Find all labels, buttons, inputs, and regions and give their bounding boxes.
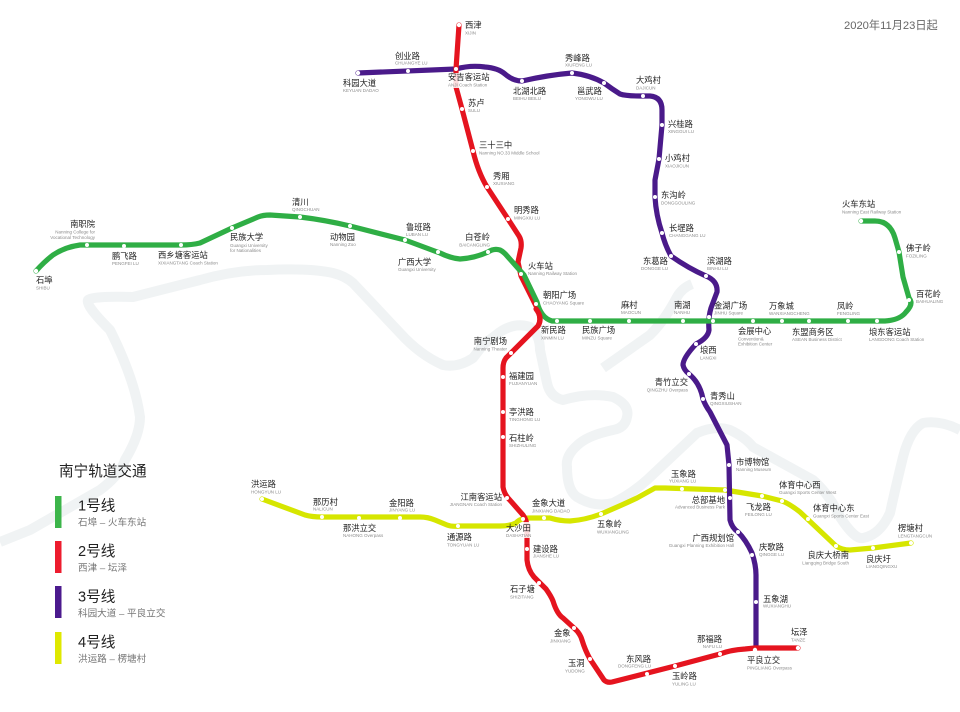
station: 通源路: TONGYUAN LU [447, 542, 479, 548]
station: 广西大学: Guangxi University [398, 267, 437, 272]
date note: 2020年11月23日起 [844, 18, 938, 32]
station: 民族大学: Guangxi University [230, 243, 269, 248]
station: 广西规划馆: 广西规划馆 [692, 533, 734, 543]
station: 朝阳广场: CHAOYANG Square [543, 300, 585, 306]
station: 玉岭路 [672, 671, 698, 686]
station: 清川: 清川 [292, 197, 309, 207]
station: 佛子岭 [906, 243, 931, 258]
station: 长堽路 [669, 223, 706, 238]
station: 兴桂路: 兴桂路 [668, 119, 694, 129]
station: 金象大道 [532, 498, 571, 514]
station: 秀峰路: XIUFENG LU [565, 62, 592, 68]
station: 青秀山: 青秀山 [710, 391, 735, 401]
metro line 1 [36, 215, 911, 321]
station: 秀厢: XIUXIANG [493, 181, 515, 186]
station: 洪运路: HONGYUN LU [251, 490, 281, 494]
station: 青竹立交 [647, 377, 689, 392]
station: 兴桂路 [668, 119, 694, 134]
station: 广西规划馆: Guangxi Planning Exhibition Hall [669, 543, 734, 548]
station: 埌西 [700, 345, 717, 360]
station: 秀厢: 秀厢 [493, 171, 510, 181]
station: 明秀路: MINGXIU LU [514, 216, 540, 220]
station: 五象岭: WUXIANGLING [597, 530, 630, 534]
legend: line 2 [55, 541, 127, 574]
station: 体育中心西: 体育中心西 [779, 480, 820, 490]
station: 福建园 [509, 371, 537, 386]
station: 火车站: Nanning Railway Station [528, 271, 578, 276]
station: 动物园: Nanning Zoo [330, 242, 356, 247]
station: 凤岭 [837, 301, 861, 316]
station: 楞塘村: LENGTANGCUN [898, 534, 932, 538]
station: 百花岭 [916, 289, 944, 304]
station: 坛泽: 坛泽 [791, 627, 808, 637]
station: 白苍岭 [459, 232, 490, 248]
station: 佛子岭: 佛子岭 [906, 243, 931, 253]
legend: line 2: 西津 – 坛泽 [78, 563, 127, 574]
legend: line 1: 石埠 – 火车东站 [78, 516, 147, 528]
station: 明秀路 [514, 205, 540, 220]
station: 新民路 [541, 325, 567, 340]
station: 平良立交 [747, 655, 793, 670]
station: 青秀山 [710, 391, 742, 406]
station: 南宁剧场: Nanning Theater [474, 346, 507, 352]
station: 五象湖: WUXIANGHU [763, 604, 791, 608]
station: 玉象路: 玉象路 [671, 469, 697, 479]
station: 市博物馆 [736, 457, 772, 472]
station: 民族广场: MINZU Square [582, 336, 613, 340]
station: 东风路 [618, 654, 652, 668]
station: 科园大道: 科园大道 [343, 78, 376, 88]
station: 南职院: Nanning College for [55, 230, 95, 234]
station: 广西大学: 广西大学 [398, 257, 431, 267]
station: 麻村: MAOCUN [621, 310, 641, 315]
station: 东沟岭 [661, 190, 696, 206]
station: 南职院 [50, 219, 96, 240]
legend: line 4: 4号线 [78, 634, 116, 651]
station: 三十三中 [479, 140, 540, 156]
station: 金阳路: 金阳路 [389, 498, 415, 508]
station: 麻村 [621, 300, 641, 315]
station: 通源路 [447, 532, 479, 548]
station: 石子塘: 石子塘 [510, 584, 535, 594]
station: 西乡塘客运站 [158, 250, 218, 266]
station: 通源路: 通源路 [447, 532, 473, 542]
station: 石子塘 [510, 584, 535, 600]
station: 科园大道: KEYUAN DADAO [343, 88, 379, 93]
station: 会展中心: Exhibition Center [738, 342, 773, 346]
station: 那洪立交: 那洪立交 [343, 523, 376, 533]
station: 金湖广场: 金湖广场 [714, 300, 747, 310]
station: 秀厢 [493, 171, 515, 186]
station: 五象湖 [763, 594, 791, 608]
station: 民族广场: 民族广场 [582, 325, 615, 335]
station: 火车站 [528, 261, 578, 276]
station: 会展中心: 会展中心 [738, 326, 772, 336]
station: 白苍岭: 白苍岭 [465, 232, 490, 242]
station: 东盟商务区: 东盟商务区 [792, 327, 834, 337]
station: 东风路: DONGFENG LU [618, 664, 651, 668]
station: 南宁剧场 [474, 336, 507, 352]
station: 江南客运站: JIANGNAN Coach Station [450, 502, 502, 507]
station: 洪运路 [251, 479, 281, 494]
legend [55, 462, 166, 665]
station: 东葛路 [641, 256, 669, 271]
station: 创业路: 创业路 [395, 51, 421, 61]
station: 苏卢 [468, 98, 485, 113]
station: 良庆圩: 良庆圩 [866, 554, 891, 564]
station: 体育中心西 [779, 480, 837, 495]
station: 平良立交: 平良立交 [747, 655, 780, 665]
station: 百花岭: BAIHUALING [916, 299, 944, 304]
station: 良庆圩 [866, 554, 897, 569]
station: 青秀山: QINGXIUSHAN [710, 401, 742, 406]
legend: line 3: 3号线 [78, 588, 116, 606]
station: 庆歌路: 庆歌路 [759, 542, 785, 552]
station: 南宁剧场: 南宁剧场 [474, 336, 507, 346]
station: 玉岭路: 玉岭路 [672, 671, 698, 681]
station: 良庆大桥南: Liangqing Bridge South [802, 560, 849, 566]
legend: line 1: 1号线 [78, 498, 116, 514]
station: 火车东站: 火车东站 [842, 199, 875, 209]
station: 总部基地: 总部基地 [692, 495, 725, 505]
station: 鹏飞路: PENGFEI LU [112, 261, 139, 266]
station: 西乡塘客运站: 西乡塘客运站 [158, 250, 208, 260]
station: 民族大学: for Nationalities [230, 248, 262, 253]
station: 动物园: 动物园 [330, 232, 355, 242]
station: 金象: JINXIANG [550, 638, 571, 644]
station: 南职院: Vocational Technology [50, 235, 96, 240]
station: 大鸡村: DAJICUN [636, 86, 656, 90]
station: 朝阳广场 [543, 290, 585, 306]
station: 体育中心东 [813, 503, 870, 518]
interchange segment red over green [536, 309, 540, 326]
station: 飞龙路: 飞龙路 [746, 502, 772, 512]
station: 平良立交: PINGLIANG Overpass [747, 666, 793, 670]
station: 西津 [465, 20, 482, 36]
station: 东盟商务区: ASEAN Business District [792, 337, 843, 342]
station: 市博物馆: 市博物馆 [736, 457, 769, 467]
station: 那历村 [313, 497, 339, 512]
station: 东葛路: DONGGE LU [641, 266, 668, 271]
station: 石柱岭: 石柱岭 [509, 433, 534, 443]
legend: line 4 [55, 632, 147, 665]
legend: line 3 [55, 586, 166, 620]
station: 建设路: JIANSHE LU [533, 554, 559, 558]
station: 金湖广场: JINHU Square [714, 310, 744, 316]
station: 万象城: WANXIANGCHENG [769, 311, 810, 316]
metro line 4 [262, 488, 911, 550]
station: 玉洞 [565, 658, 585, 674]
station: 江南客运站: 江南客运站 [460, 492, 502, 502]
station: 建设路: 建设路 [533, 544, 559, 554]
station: 那历村: NALICUN [313, 506, 333, 512]
station: 青竹立交: 青竹立交 [655, 377, 688, 387]
station: 洪运路: 洪运路 [251, 479, 277, 489]
station: 金湖广场 [714, 300, 747, 316]
station: 良庆圩: LIANGQINGXU [866, 564, 897, 569]
station: 民族大学 [230, 232, 269, 253]
station: 南湖: NANHU [674, 310, 690, 315]
station: 石子塘: SHIZITANG [510, 594, 534, 600]
station: 东沟岭: 东沟岭 [661, 190, 686, 200]
station: 鹏飞路 [112, 251, 139, 266]
station: 那福路 [697, 634, 723, 649]
station: 安吉客运站: ANJI Coach Station [448, 82, 488, 88]
station: 总部基地 [675, 495, 726, 510]
station: 玉岭路: YULING LU [672, 682, 696, 686]
station: 小鸡村 [665, 153, 691, 168]
station: 秀峰路 [565, 53, 592, 68]
station: 埌东客运站: 埌东客运站 [869, 327, 910, 337]
metro line 3 [358, 66, 756, 648]
station: 那洪立交 [343, 523, 384, 538]
station: 佛子岭: FOZILING [906, 254, 927, 258]
station: 鹏飞路: 鹏飞路 [112, 251, 138, 261]
station: 西津: XIJIN [465, 30, 476, 36]
station: 小鸡村: XIAOJICUN [665, 164, 689, 168]
station: 火车东站 [842, 199, 902, 214]
station: 埌西: LANGXI [700, 356, 717, 360]
station: 庆歌路: QINGGE LU [759, 552, 784, 557]
station: 南职院: 南职院 [70, 219, 96, 229]
station: 麻村: 麻村 [621, 300, 638, 310]
station: 创业路: CHUANGYE LU [395, 60, 428, 66]
station: 金阳路: JINYANG LU [389, 508, 415, 512]
station: 长堽路: CHANGGANG LU [669, 233, 706, 238]
station: 大沙田: DASHATIAN [506, 533, 531, 538]
station: 鲁班路: 鲁班路 [406, 222, 432, 232]
station: 白苍岭: BAICANGLING [459, 242, 490, 248]
station: 苏卢: 苏卢 [468, 98, 485, 108]
station: 兴桂路: XINGGUI LU [668, 129, 694, 134]
legend title: 南宁轨道交通 [59, 462, 147, 480]
station: 滨湖路 [707, 256, 733, 271]
station: 那洪立交: NAHONG Overpass [343, 533, 384, 538]
station: 飞龙路: FEILONG LU [745, 512, 772, 517]
station: 亭洪路 [509, 407, 540, 422]
station: 江南客运站 [450, 492, 502, 507]
metro line 2 [456, 25, 798, 682]
station: 金象: 金象 [554, 628, 571, 638]
station: 长堽路: 长堽路 [669, 223, 695, 233]
station: 体育中心东: 体育中心东 [813, 503, 854, 513]
station: 民族大学: 民族大学 [230, 232, 263, 242]
station: 福建园: FUJIANYUAN [509, 381, 537, 386]
station: 西津: 西津 [465, 20, 482, 30]
station: 建设路 [533, 544, 559, 558]
station: 青竹立交: QINGZHU Overpass [647, 388, 689, 392]
station: 东葛路: 东葛路 [643, 256, 669, 266]
station: 北湖北路: 北湖北路 [513, 86, 547, 96]
station: 石柱岭: SHIZHULING [509, 443, 537, 448]
station: 石柱岭 [509, 433, 537, 448]
station: 新民路: XINMIN LU [541, 336, 564, 340]
station: 安吉客运站 [448, 72, 490, 88]
station: 民族广场 [582, 325, 615, 340]
station: 玉象路: YUXIANG LU [669, 478, 696, 484]
station: 体育中心东: Guangxi Sports Center East [813, 514, 870, 518]
station: 石埠: SHIBU [36, 286, 50, 290]
station: 科园大道 [343, 78, 379, 93]
station: 北湖北路 [513, 86, 547, 101]
station: 邕武路: YONGWU LU [575, 96, 603, 101]
legend: line 1 [55, 496, 147, 528]
station: 鲁班路 [406, 222, 432, 237]
station: 玉象路 [669, 469, 697, 484]
station: 会展中心: Convention& [738, 336, 764, 342]
station: 飞龙路 [745, 502, 772, 517]
station: 清川 [292, 197, 320, 212]
label halos over lines [452, 73, 531, 538]
station: 那福路: NAFU LU [703, 644, 722, 649]
station: 亭洪路: TINGHONG LU [509, 417, 540, 422]
station: 邕武路: 邕武路 [577, 86, 603, 96]
station: 创业路 [395, 51, 428, 66]
station: 火车东站: Nanning East Railway Station [842, 210, 902, 214]
station: 清川: QINGCHUAN [292, 207, 320, 212]
station: 大沙田 [506, 523, 531, 538]
station: 坛泽: TANZE [791, 638, 805, 642]
station: 东风路: 东风路 [626, 654, 652, 664]
station: 东沟岭: DONGGOULING [661, 200, 696, 206]
legend: line 3: 科园大道 – 平良立交 [78, 608, 166, 620]
station: 凤岭: FENGLING [837, 311, 861, 316]
station: 金象 [550, 628, 571, 644]
station: 大沙田: 大沙田 [506, 523, 531, 533]
station: 埌东客运站 [869, 327, 925, 342]
station: 那福路: 那福路 [697, 634, 723, 644]
station: 广西规划馆 [669, 533, 734, 548]
station: 石埠 [36, 275, 53, 290]
station: 广西大学 [398, 257, 437, 272]
station: 五象岭: 五象岭 [597, 519, 622, 529]
station: 新民路: 新民路 [541, 325, 567, 335]
station: 楞塘村: 楞塘村 [898, 523, 924, 533]
station: 滨湖路: BINHU LU [707, 266, 728, 271]
station: 南湖: 南湖 [674, 300, 691, 310]
station: 亭洪路: 亭洪路 [509, 407, 535, 417]
station: 动物园 [330, 232, 356, 247]
station: 万象城: 万象城 [769, 301, 795, 311]
station: 明秀路: 明秀路 [514, 205, 540, 215]
station: 小鸡村: 小鸡村 [665, 153, 691, 163]
station: 玉洞: YUDONG [565, 668, 585, 674]
station: 体育中心西: Guangxi Sports Center West [779, 490, 837, 495]
station: 玉洞: 玉洞 [568, 658, 585, 668]
legend: line 2: 2号线 [78, 543, 116, 560]
station: 火车站: 火车站 [528, 261, 553, 271]
station: 西乡塘客运站: XIXIANGTANG Coach Station [158, 260, 218, 266]
station: 楞塘村 [898, 523, 932, 538]
station: 市博物馆: Nanning Museum [736, 467, 772, 472]
station: 大鸡村 [636, 75, 662, 90]
station: 南湖 [674, 300, 691, 315]
station: 福建园: 福建园 [509, 371, 534, 381]
legend: line 4: 洪运路 – 楞塘村 [78, 653, 147, 665]
station: 百花岭: 百花岭 [916, 289, 941, 299]
station: 石埠: 石埠 [36, 275, 53, 285]
station: 总部基地: Advanced Business Park [675, 504, 726, 510]
station: 会展中心 [738, 326, 773, 346]
station: 金象大道: JINXIANG DADAO [532, 508, 571, 514]
station: 良庆大桥南: 良庆大桥南 [808, 550, 849, 560]
station: 秀峰路: 秀峰路 [565, 53, 591, 63]
station: 坛泽 [791, 627, 808, 642]
station: 滨湖路: 滨湖路 [707, 256, 733, 266]
station: 大鸡村: 大鸡村 [636, 75, 662, 85]
station: 朝阳广场: 朝阳广场 [543, 290, 576, 300]
station: 那历村: 那历村 [313, 497, 339, 507]
station: 庆歌路 [759, 542, 785, 557]
river background [0, 269, 960, 542]
station: 安吉客运站: 安吉客运站 [448, 72, 490, 82]
station: 三十三中: 三十三中 [479, 140, 512, 150]
station: 五象湖: 五象湖 [763, 594, 788, 604]
station: 良庆大桥南 [802, 550, 849, 566]
station: 金阳路 [389, 498, 415, 512]
station: 埌东客运站: LANGDONG Coach Station [869, 337, 925, 342]
station: 万象城 [769, 301, 810, 316]
station: 三十三中: Nanning NO.33 Middle School [479, 150, 540, 156]
station: 五象岭 [597, 519, 630, 534]
station: 金象大道: 金象大道 [532, 498, 565, 508]
station: 东盟商务区 [792, 327, 843, 342]
station: 鲁班路: LUBAN LU [406, 232, 428, 237]
station: 凤岭: 凤岭 [837, 301, 854, 311]
station: 北湖北路: BEIHU BEILU [513, 96, 541, 101]
station: 邕武路 [575, 86, 603, 101]
station: 埌西: 埌西 [700, 345, 717, 355]
station: 苏卢: SULU [468, 108, 480, 113]
